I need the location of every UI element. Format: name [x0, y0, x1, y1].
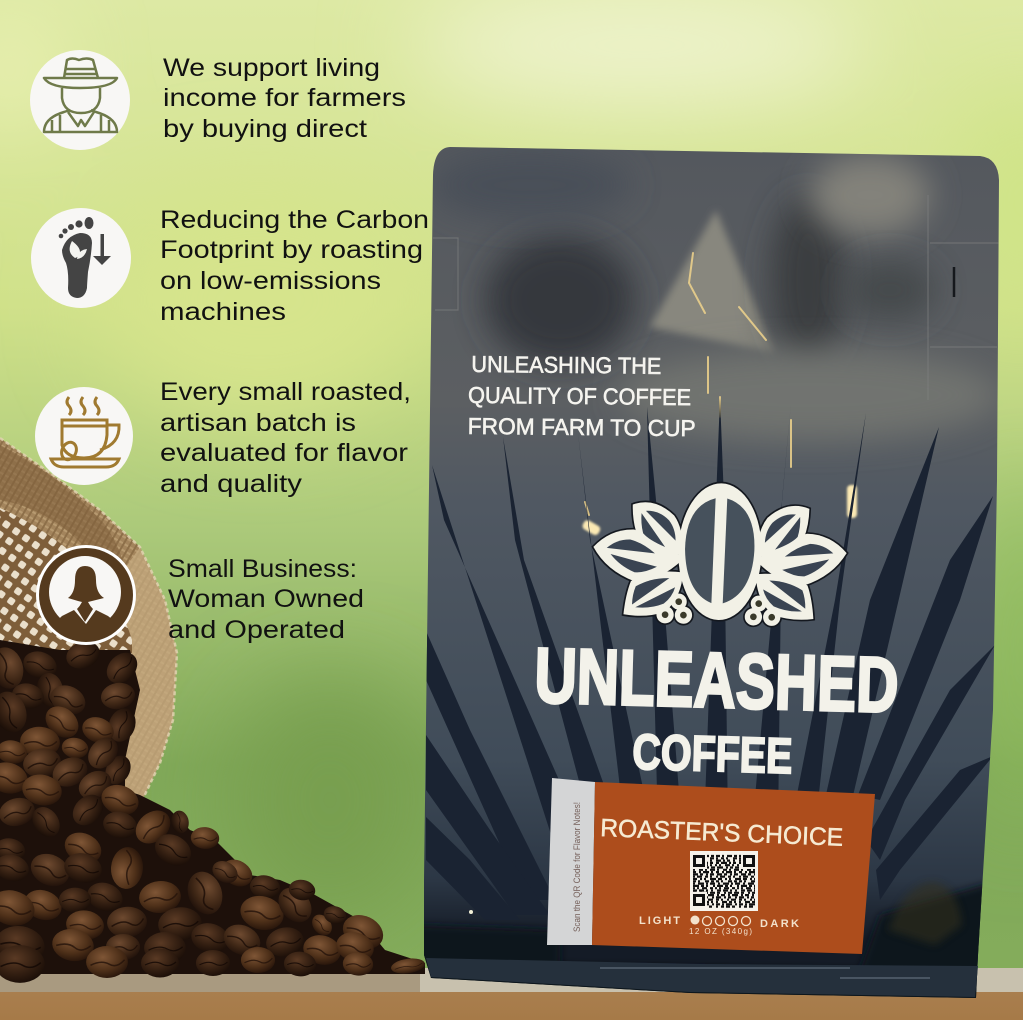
text: woman owned: Small Business:: [168, 555, 357, 583]
bag slogan: QUALITY OF COFFEE: [468, 382, 691, 410]
brand name: UNLEASHED: [533, 631, 900, 729]
icon: footprint with arrow: [31, 208, 131, 308]
text: artisan batch: artisan batch is: [160, 409, 356, 437]
text: carbon footprint: Reducing the Carbon: [160, 206, 429, 234]
feature 1: living income: [30, 50, 406, 150]
text: woman owned: and Operated: [168, 616, 345, 644]
bag slogan: [468, 351, 696, 441]
text: artisan batch: Every small roasted,: [160, 378, 411, 406]
brand name: [532, 631, 900, 787]
bag slogan: UNLEASHING THE: [471, 351, 661, 379]
roast scale: 12 OZ (340g): [689, 927, 752, 936]
logo outline: [592, 480, 848, 628]
bag slogan: FROM FARM TO CUP: [468, 413, 696, 441]
brand name: COFFEE: [632, 724, 793, 784]
text: artisan batch: and quality: [160, 470, 303, 498]
icon: farmer: [30, 50, 130, 150]
roast scale: LIGHT: [639, 915, 681, 927]
product label: [547, 778, 875, 954]
bag body: [424, 147, 999, 998]
feature 2: carbon footprint: [31, 206, 429, 326]
text: carbon footprint: on low-emissions: [160, 267, 381, 295]
side note: Scan the QR Code for Flavor Notes!: [572, 802, 582, 932]
wooden table top: [0, 968, 1023, 1020]
logo white shape: [592, 480, 848, 628]
burlap sack: [0, 438, 177, 810]
text: woman owned: [168, 555, 364, 644]
leaf veins: [605, 510, 834, 622]
bag bottom seal: [426, 910, 978, 997]
QR code: [690, 851, 758, 911]
sunburst rays: [426, 397, 995, 920]
feature 4: woman owned: [36, 545, 364, 645]
icon: coffee cup: [35, 387, 133, 485]
roast scale: DARK: [760, 918, 800, 930]
bag bottom shadow: [424, 880, 982, 998]
bag folds and sheen: [430, 150, 1000, 536]
text: carbon footprint: Footprint by roasting: [160, 236, 423, 264]
text: living income: by buying direct: [163, 115, 367, 143]
roast scale: [639, 915, 800, 936]
coffee bean pile: [0, 637, 426, 983]
text: living income: We support living: [163, 54, 380, 82]
text: artisan batch: [160, 378, 411, 498]
icon: businesswoman: [36, 545, 136, 645]
text: artisan batch: evaluated for flavor: [160, 439, 408, 467]
text: carbon footprint: machines: [160, 298, 286, 326]
logo: bean and leaves: [592, 480, 848, 628]
text: living income: [163, 54, 406, 143]
text: carbon footprint: [160, 206, 429, 326]
text: woman owned: Woman Owned: [168, 585, 364, 613]
coffee bag: [415, 147, 1000, 1005]
label heading: ROASTER'S CHOICE: [600, 814, 844, 852]
feature 3: artisan batch: [35, 378, 411, 498]
bean halves: [684, 497, 756, 604]
text: living income: income for farmers: [163, 84, 406, 112]
